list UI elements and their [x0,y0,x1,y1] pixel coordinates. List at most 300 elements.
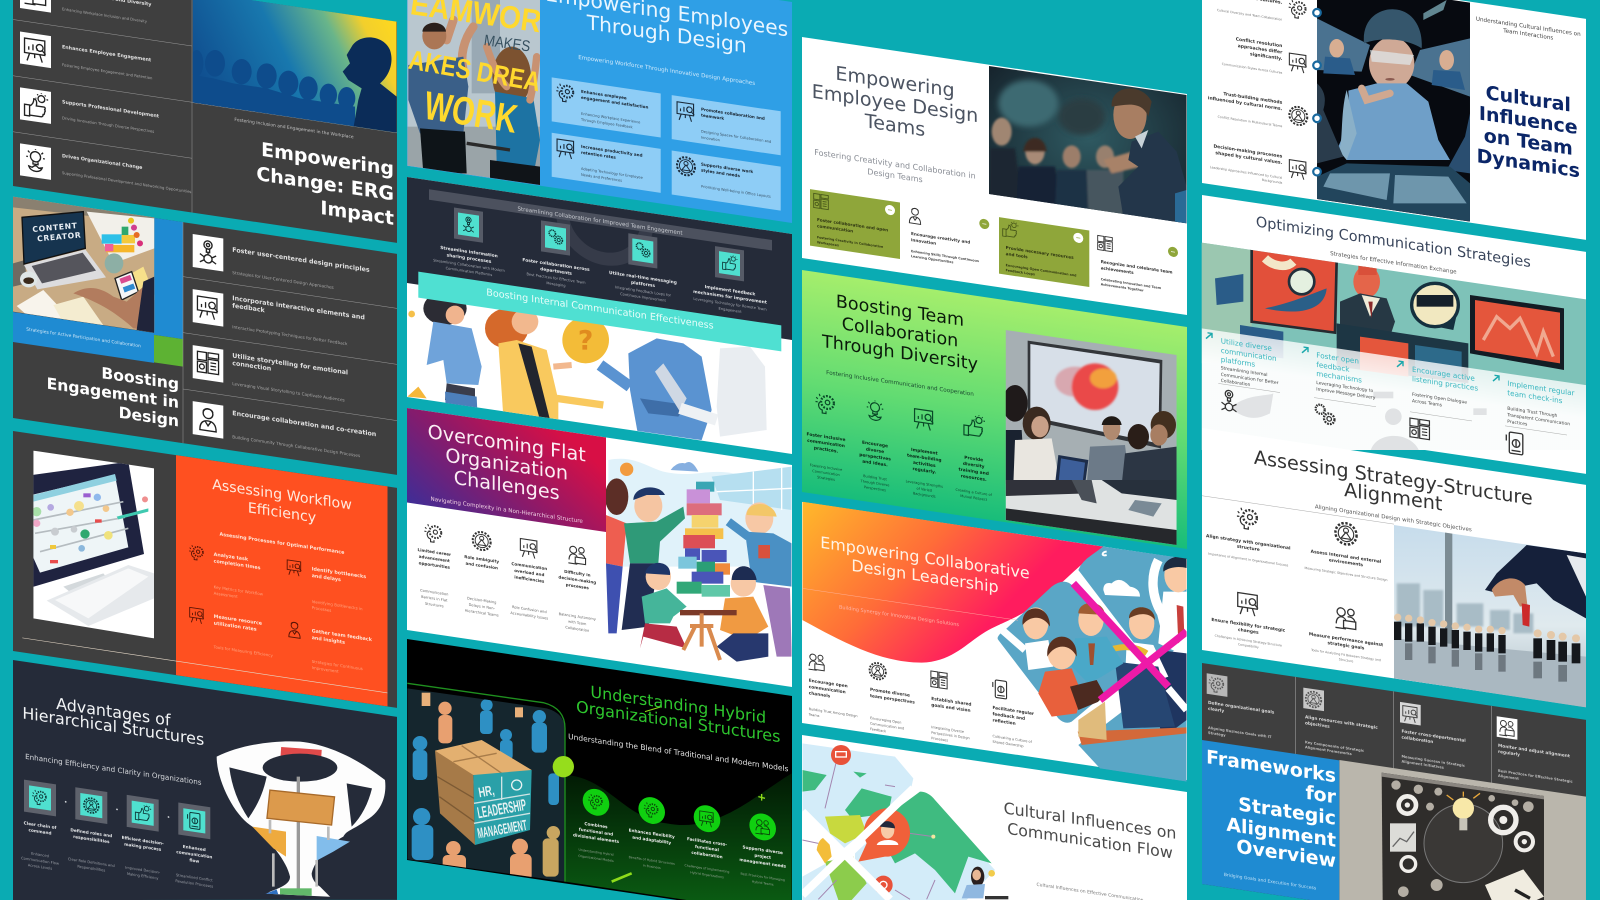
item: diverse project needs: Best Practices for Managing [740,872,785,882]
row: user-centered design: Foster user-centered design principles [232,247,370,274]
column: communication overload: overload and [514,568,544,577]
item: communication flow: communication [176,849,212,860]
column: diverse perspectives: Building Trust [863,474,887,482]
row: storytelling: Utilize storytelling for emotional [232,352,348,377]
column: open communication: Teams [808,712,820,718]
row: storytelling [193,345,348,403]
card: work styles [672,150,781,211]
item: flexibility: in Business [643,863,661,870]
item: feedback mechanisms: Implement feedback [705,284,756,298]
slide: Boosting Engagement in Design [10,193,397,475]
item: functional and divisional: functional and [579,827,613,837]
photo: HR leadership cube: LEADERSHIP [476,797,528,822]
item: collaboration across departments [522,218,590,292]
title: Alignment [1226,814,1336,852]
column: team perspectives: Promote diverse [870,687,910,699]
item: resource utilization: Measure resource [214,614,263,627]
title: Challenges [454,466,560,505]
item: conflict resolution: approaches differ [1238,43,1283,56]
card: productivity: retention rates [581,150,616,160]
card: work styles: Supports diverse work [701,162,753,174]
photo: hand placing red figure [1392,523,1588,710]
item: diverse platforms: platforms [1221,355,1255,369]
column: decision making [558,544,597,634]
item: feedback mechanisms: mechanisms for improvement [693,289,767,306]
title: Engagement in [47,374,179,412]
item: regular check-ins: Practices [1507,419,1528,428]
item: functional and divisional: Organizational Models [578,854,614,863]
trophy org chart illustration [217,741,385,900]
teal title band [418,272,781,351]
title: Collaboration [842,314,958,352]
row: organizational change [20,143,191,201]
illustration: team building block tower [605,459,792,662]
column: diverse perspectives: Encourage [862,440,888,449]
column: diversity training: resources. [961,473,987,483]
item: feedback mechanisms [1302,347,1376,431]
item: completion times [189,545,264,603]
item: real-time messaging: Continuous Improvement [620,292,666,303]
item: regular check-ins: Implement regular [1507,379,1575,398]
item: bottlenecks: Identify bottlenecks [312,566,366,580]
subtitle: Navigating Complexity in a Non-Hierarchical Structure [431,497,583,525]
title: Cultural [1486,81,1571,117]
item: bottlenecks [287,560,366,618]
column: team building [906,407,943,500]
column: career opportunities: Communication [420,588,448,597]
title: on Team [1484,124,1573,160]
column: open communication: channels [809,690,831,700]
item: trust building: Conflict Resolution in Multicultural Teams [1218,115,1283,128]
card: resources and tools: Feedback Loops [1006,268,1035,276]
item: team feedback: and insights [312,635,345,646]
column: monitor and adjust: Best Practices for Effective Strategic [1498,769,1573,784]
slide: Cultural Influence on Team Dynamics [1202,0,1586,240]
item: conflict resolution: significantly. [1250,51,1283,62]
item: diverse platforms: communication [1221,346,1277,363]
card: creativity and innovation: Enhancing Skills Through Continuous [911,249,979,263]
slide: Empowering Employee Design Teams [802,37,1190,315]
column: career opportunities: Barriers in Flat [421,595,448,603]
item: performance: strategic goals [1328,640,1365,652]
item: active listening: listening practices [1412,374,1478,393]
card: productivity: Adapting Technology for Employee [581,167,644,180]
column: feedback and reflection: feedback and [993,711,1025,722]
item: feedback mechanisms: Leveraging Technology to [1316,380,1373,394]
title: Communication Flow [1007,819,1173,862]
lower green wave [565,773,792,900]
column: diverse perspectives: perspectives [859,452,891,463]
column: organizational goals: Aligning Business Goals with IT [1208,726,1272,739]
row: interactive elements: Incorporate interactive elements and [232,295,365,322]
row: user-centered design: Strategies for User-Centered Design Approaches [232,270,334,290]
column: inclusive communication: Foster inclusive [807,431,845,443]
item: bottlenecks: and delays [312,573,341,583]
item: decision making: making process [124,841,162,852]
subtitle: Understanding Cultural Influences on [1476,17,1581,38]
item: chain of command: Across Levels [28,863,52,871]
item: diverse platforms: Streamlining Internal [1221,365,1267,378]
streamlining band: Streamlining Collaboration for Improved Team Engagement [517,206,683,237]
item: communication flow: Streamlined Conflict [176,873,213,883]
column: diversity training: training and [959,467,989,477]
item: cross-functional: Challenges of Implementing [685,863,729,874]
title: Boosting Team [836,292,964,331]
photo: teamwork wall: MAKES [483,32,531,55]
column: inclusive communication: communication [807,438,845,449]
column: feedback and reflection: reflection [993,718,1016,727]
item: trust building: influenced by cultural norms. [1208,95,1283,112]
column: diversity training: Mutual Respect [960,494,988,502]
row: organizational change: Drives Organizational Change [62,153,143,171]
item: diverse project needs [739,810,787,889]
item: conflict resolution [1222,34,1307,78]
card: engagement: engagement and satisfaction [581,95,648,110]
row: storytelling: Leveraging Visual Storytelling to Captivate Audiences [232,381,345,403]
column: shared goals: Processes [931,736,948,743]
photo: workflow monitor [32,448,155,640]
card: recognize achievements [1098,235,1178,298]
column: align resources: Align resources with strategic [1305,714,1378,731]
column: role ambiguity: Hierarchical Teams [465,609,499,618]
row: employee engagement [20,32,153,83]
column: decision making: decision-making [558,574,596,585]
card: resources and tools [999,217,1089,287]
card: work styles: Prioritizing Well-being in Office Layouts [701,185,771,199]
title: Alignment [1344,478,1443,516]
title: Organization [445,444,568,485]
item: decision making: Efficient decision- [122,835,164,846]
item: communication flow [175,802,213,889]
column: team building: activities [913,460,936,469]
subtitle: Team Interactions [1502,28,1553,42]
item: resource utilization: Tools for Measuring Efficiency [213,644,273,658]
item: diverse platforms [1206,333,1280,418]
item: diverse project needs: Supports diverse [743,844,783,855]
item: roles: Defined roles and [70,827,112,838]
column: career opportunities [418,523,452,610]
column: open communication [808,653,858,724]
title: Organizational Structures [576,697,780,746]
column: career opportunities: Structures [425,602,444,608]
card: engagement: Enhancing Workplace Experience [581,112,641,125]
item: team feedback: Strategies for Continuous [312,659,363,671]
column: team building: Backgrounds [913,491,936,499]
item: roles: Responsibilities [77,865,105,873]
card: teamwork: Promotes collaboration and [701,107,765,121]
photo: teamwork wall: WORK [421,84,520,142]
column: align resources: objectives [1305,720,1330,730]
item: information sharing [433,204,505,279]
item: decision making: Decision-making processes [1213,144,1283,160]
card: resources and tools: and tools [1006,251,1028,259]
photo: HR leadership cube: MANAGEMENT [476,818,528,842]
slide: Overcoming Flat Organization Challenges [407,408,792,687]
card: creativity and innovation: Learning Opportunities [911,254,953,264]
item: feedback mechanisms [693,243,767,318]
photo: teamwork wall: AKES DREA [406,44,543,97]
subtitle: Understanding the Blend of Traditional and Modern Models [568,732,789,773]
streamlining band [429,189,772,251]
row: inclusion and diversity: Enhancing Workplace Inclusion and Diversity [62,6,148,24]
item: active listening: Encourage active [1412,365,1475,383]
item: flexibility [1211,589,1286,653]
card: collaboration and open communication: Workspaces [817,240,839,247]
card: collaboration and open communication [810,189,900,259]
photo: meeting around a screen [1002,328,1178,485]
item: decision making: Leadership Approaches Influenced by Cultural [1210,165,1282,180]
title: Efficiency [248,500,317,526]
item: flexibility: Ensure flexibility for strategic [1211,617,1286,634]
slide: Empowering Change ERG Impact [13,0,400,243]
illustration: world map pins [802,743,1008,900]
item: flexibility: and adaptability [632,835,671,845]
column: organizational goals [1207,673,1275,745]
column: communication overload: Role Confusion and [512,605,547,614]
item: chain of command: command [29,827,51,836]
item: feedback mechanisms: mechanisms [1316,369,1362,385]
column: communication overload: Accountability Issues [510,611,548,621]
column: diverse perspectives: Perspectives [864,485,886,492]
item: team norms: Cultural Diversity and Team Collaboration [1217,8,1282,22]
column: shared goals: Integrating Diverse [931,725,964,734]
photo: crowd and speaker silhouette [190,0,400,137]
item: internal and external: environments [1329,557,1363,568]
column: feedback and reflection: Facilitate regular [993,705,1035,717]
item: regular check-ins: team check-ins [1507,388,1563,405]
item: decision making: Improved Decision- [125,866,161,875]
row: professional development [20,87,160,140]
item: diverse project needs: Hybrid Teams [752,880,774,887]
item: decision making: Backgrounds [1262,178,1283,185]
item: flexibility: Benefits of Hybrid Structures [629,855,675,866]
card: productivity [552,133,661,193]
column: open communication: Building Trust Among Design [809,707,858,718]
card: collaboration and open communication: Foster collaboration and open [817,217,888,233]
item: cross-functional: Hybrid Organizations [690,870,724,879]
column: team building: Implement [911,447,938,457]
column: shared goals: Establish shared [931,696,971,708]
item: diverse project needs: management needs [739,857,787,869]
column: align resources [1303,688,1378,760]
row: co-creation: Encourage collaboration and co-creation [232,410,377,438]
item: active listening: Across Teams [1412,398,1443,409]
column: diverse perspectives [859,398,891,493]
title: Hierarchical Structures [22,703,204,749]
item: align strategy: Align strategy with organizational [1206,533,1291,552]
column: diversity training: Creating a Culture of [956,488,993,497]
photo: content creator desk: CONTENT [32,221,78,234]
item: collaboration across departments: Messaging [546,281,566,288]
column: cross-departmental: collaboration [1402,735,1433,745]
row: co-creation [193,401,377,461]
item: internal and external: Assess internal and external [1311,549,1382,565]
column: decision making: Difficulty in [564,569,591,578]
column: diversity training: Provide [964,455,983,463]
item: diverse platforms: Utilize diverse [1221,336,1272,353]
title: Cultural Influences on [1004,798,1176,843]
item: cross-functional [685,802,729,880]
photo: retro control room [1202,242,1586,450]
item: completion times: completion times [214,559,261,571]
item: chain of command: Clear chain of [24,820,56,830]
title: Boosting [101,363,179,394]
column: team building: Leveraging Strengths [906,479,943,489]
column: team building: of Varied [917,486,932,493]
title: Through Design [586,10,747,58]
item: chain of command: Enhanced [31,852,49,858]
subtitle: Strategies for Effective Information Exchange [1330,251,1457,276]
item: performance: Structure [1339,657,1353,663]
item: flexibility: Enhances flexibility [629,828,675,839]
subtitle: Aligning Organizational Design with Strategic Objectives [1315,504,1472,533]
title: Employee Design [812,80,978,127]
column: monitor and adjust: Monitor and adjust alignment [1498,743,1570,759]
column: diversity training: diversity [963,461,985,470]
card: recognize achievements: Recognize and celebrate team [1101,259,1173,275]
title: Empowering Collaborative [820,533,1030,583]
item: feedback mechanisms: Engagement [719,307,742,314]
band subtitle: Strategies for Active Participation and Collaboration [26,326,141,349]
row: interactive elements [193,289,365,349]
photo: HR leadership cube [407,687,567,883]
slide: Boosting Team Collaboration Through Diversity [802,270,1187,549]
illustration: gradient blob and team cartoon [802,502,1192,782]
item: decision making: shaped by cultural values. [1215,150,1283,166]
column: team perspectives: team perspectives [870,693,915,706]
column: monitor and adjust: Alignment [1498,774,1519,781]
card: productivity: Needs and Preferences [581,173,622,183]
item: real-time messaging: Integrating Feedback Loops for [615,285,672,298]
item: team norms [1217,0,1306,25]
subtitle: Assessing Processes for Optimal Performance [220,532,345,556]
item: team feedback: Gather team feedback [312,628,373,643]
column: organizational goals: Define organizational goals [1208,700,1275,716]
title: Advantages of [56,694,171,730]
column: feedback and reflection: Cultivating a Culture of [993,734,1033,744]
item: roles: responsibilities [73,834,110,844]
column: open communication: Encourage open [809,678,848,689]
title: Assessing Workflow [212,477,352,514]
title: Design [119,403,179,431]
card: teamwork: Designing Spaces for Collaboration and [701,130,771,144]
column: cross-departmental: Measuring Success in Strategic [1402,755,1465,768]
column: role ambiguity: and confusion [465,561,498,570]
title: Impact [320,196,394,230]
item: flexibility [629,794,675,872]
column: organizational goals: Strategy [1208,731,1226,738]
card: teamwork: Innovation [701,136,720,142]
item: functional and divisional: Understanding Hybrid [578,848,614,857]
slide: Advantages of Hierarchical Structures [13,660,397,900]
title: Strategic [1238,793,1336,830]
subtitle: Fostering Creativity and Collaboration in [814,148,976,181]
item: align strategy: Importance of Alignment in Organizational Success [1208,552,1289,568]
item: information sharing: Streamline information [440,245,498,259]
column: diversity training [956,412,993,503]
column: team perspectives [870,662,915,738]
item: bottlenecks: Identifying Bottlenecks in [312,599,363,611]
illustration: office people talking [407,292,767,440]
item: performance: Tools for Analyzing Fit Between Strategy and [1310,648,1381,662]
item: trust building: Trust-building methods [1223,91,1283,106]
column: team perspectives: Feedback [870,727,886,733]
card: collaboration and open communication: Fostering Creativity in Collaborative [817,235,884,249]
column: communication overload: inefficiencies [514,574,545,584]
slide: Cultural Influences on Communication Flow [802,735,1187,900]
row: employee engagement: Fostering Employee Engagement and Retention [62,62,153,81]
row: professional development: Supports Professional Development [62,99,160,120]
column: inclusive communication: practices. [814,445,838,455]
item: information sharing: Communication Platforms [446,266,492,277]
subtitle: Bridging Goals and Execution for Success [1224,872,1317,892]
card: creativity and innovation: innovation [911,237,936,246]
column: align resources: Alignment Frameworks [1305,745,1352,756]
photo: content creator desk [10,193,157,337]
item: align strategy: structure [1237,544,1260,553]
photo: HR leadership cube: HR, [477,782,496,800]
subtitle: Building Synergy for Innovative Design Solutions [839,605,959,628]
subtitle: Fostering Inclusion and Engagement in the Workplace [234,117,354,140]
item: cross-functional: functional [695,844,719,852]
column: diverse perspectives: diverse [866,446,884,455]
column: communication overload [510,537,548,621]
item: cross-functional: Facilitates cross- [687,836,727,847]
column: cross-departmental: Foster cross-departmental [1402,729,1466,744]
column: shared goals [931,671,971,746]
column: role ambiguity: Delays in Non- [469,603,495,611]
item: functional and divisional [573,786,619,864]
item: decision making [122,794,164,881]
title: Optimizing Communication Strategies [1256,215,1531,271]
item: diverse project needs: project [754,853,771,860]
item: flexibility: changes [1238,627,1259,636]
column: team building: team-building [907,453,942,464]
column: monitor and adjust [1497,716,1573,789]
row: interactive elements: feedback [232,302,266,314]
card: creativity and innovation [909,208,989,270]
slide: Assessing Workflow Efficiency [13,431,397,708]
title: Influence [1479,102,1578,139]
title: Frameworks [1206,746,1336,787]
item: completion times: Key Metrics for Workflow [214,584,264,597]
item: roles [68,786,115,874]
card: recognize achievements: Achievements Together [1101,282,1144,293]
column: diverse perspectives: Through Diverse [860,479,889,487]
photo: content creator desk: CREATOR [37,230,82,243]
title: Overcoming Flat [428,420,586,466]
teal title band: Boosting Internal Communication Effectiveness [486,287,714,332]
column: cross-departmental [1400,702,1466,773]
item: decision making: Making Efficiency [127,872,159,881]
photo: woman at holographic table [1315,0,1472,223]
item: cross-functional: collaboration [691,850,723,859]
item: real-time messaging: Utilize real-time messaging [609,270,677,286]
item: diverse platforms: Communication for Better [1221,372,1279,386]
column: inclusive communication: Communication [812,469,840,477]
photo: teamwork wall [406,0,544,188]
item: regular check-ins: Building Trust Through [1507,406,1558,419]
subtitle: Empowering Workforce Through Innovative Design Approaches [578,55,755,87]
item: feedback mechanisms: Improve Message Delivery [1316,386,1376,401]
card: creativity and innovation: Encourage creativity and [911,231,970,245]
item: regular check-ins [1493,375,1575,463]
slide: Empowering Employees Through Design [406,0,792,223]
item: active listening [1397,361,1478,447]
column: role ambiguity: Role ambiguity [464,554,499,564]
column: career opportunities: Limited career [418,547,452,557]
card: teamwork [672,95,781,155]
